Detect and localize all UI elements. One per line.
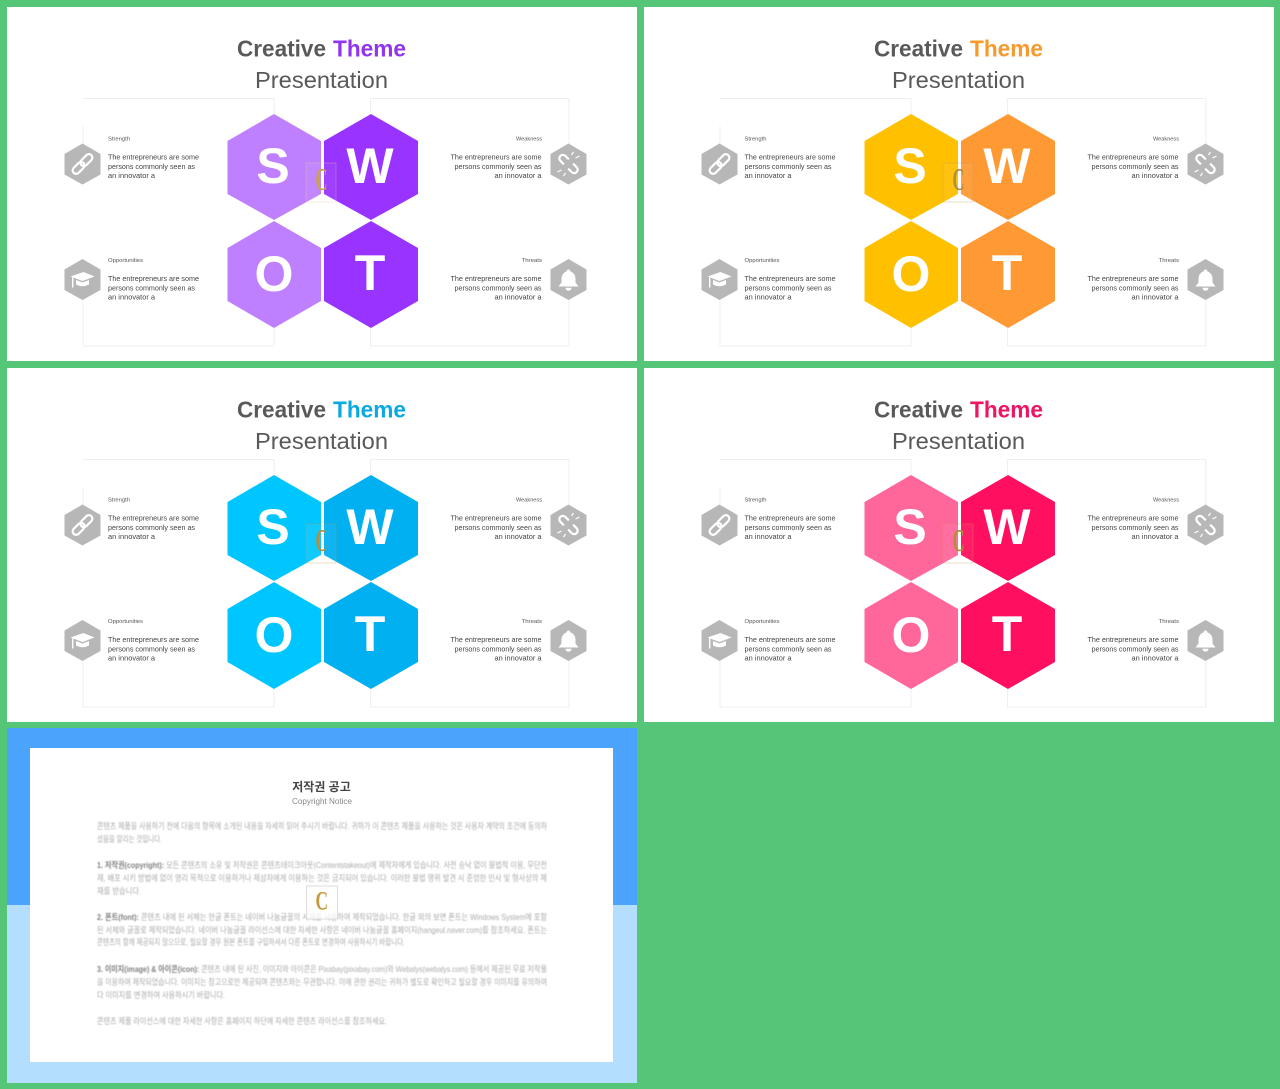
SWOT hexagons — [864, 475, 1055, 689]
icon: graduation cap — [702, 259, 738, 300]
SWOT hexagons: O — [892, 246, 930, 302]
text block: notice body: 재를 받습니다. — [97, 886, 141, 896]
text: weakness: an innovator a — [1132, 171, 1179, 180]
title: Theme — [333, 396, 406, 422]
text: threats: Threats — [522, 619, 542, 625]
title: Theme — [333, 36, 406, 62]
text: strength — [744, 136, 836, 180]
text: threats — [450, 258, 542, 302]
watermark — [943, 522, 973, 563]
panel: pink SWOT slide — [644, 368, 1274, 722]
title: Theme — [970, 396, 1043, 422]
SWOT hexagons: S — [256, 499, 290, 555]
text: threats: an innovator a — [494, 654, 542, 662]
heading: copyright notice: Copyright Notice — [292, 797, 353, 806]
text block: notice body: 콘텐츠 제품을 사용하기 전에 다음의 항목에 소개된 내용을 자세히 읽어 주시기 바랍니다. 귀하가 이 콘텐츠 제품을 사용하는 것은 사용자 계약의 조건에 동의하 — [97, 821, 547, 831]
text: threats: an innovator a — [1132, 654, 1179, 662]
SWOT hexagons — [228, 114, 418, 328]
text: strength: The entrepreneurs are some — [744, 514, 836, 522]
text block: notice body: 2. 폰트(font): 콘텐츠 내에 된 서체는 한글 폰트는 네이버 나눔글꼴의 서체를 사용하여 제작되었습니다. 한글 외의 보면 폰트는 Windows System에 포함 — [97, 912, 547, 922]
SWOT hexagons — [864, 114, 1055, 328]
title: Creative — [874, 396, 963, 422]
icon: broken link — [1188, 504, 1224, 546]
text: strength: The entrepreneurs are some — [744, 152, 836, 162]
text: weakness: Weakness — [1153, 136, 1179, 142]
title: Creative — [237, 36, 326, 62]
text: opportunities — [744, 619, 836, 662]
text: opportunities: persons commonly seen as — [744, 644, 832, 654]
watermark: C — [316, 522, 328, 558]
text: opportunities: Opportunities — [744, 258, 780, 264]
title — [874, 36, 1043, 93]
heading: copyright notice: 저작권 공고 — [292, 779, 351, 794]
text: strength: an innovator a — [744, 532, 792, 541]
SWOT hexagons: O — [255, 246, 293, 302]
icon: link — [702, 144, 738, 184]
text: weakness: The entrepreneurs are some — [450, 514, 542, 522]
text: threats: Threats — [522, 258, 542, 264]
panel: orange SWOT slide — [644, 7, 1274, 361]
text: opportunities: Opportunities — [744, 619, 780, 625]
SWOT hexagons: S — [893, 499, 927, 555]
text: strength: Strength — [744, 498, 766, 504]
icon: bell — [550, 259, 586, 300]
text: strength: persons commonly seen as — [108, 162, 195, 171]
panel: purple SWOT slide — [7, 7, 637, 361]
text: strength: persons commonly seen as — [744, 523, 832, 532]
icon: bell — [550, 620, 586, 661]
text: weakness: an innovator a — [1132, 532, 1179, 541]
text: opportunities: The entrepreneurs are some — [108, 635, 199, 644]
title: Presentation — [255, 67, 388, 93]
text block: notice body: 다 이미지를 변경하여 사용하시기 바랍니다. — [97, 990, 225, 1000]
watermark — [306, 161, 336, 202]
text: weakness: persons commonly seen as — [1092, 523, 1179, 532]
watermark: C — [316, 886, 328, 916]
watermark: C — [952, 522, 964, 558]
SWOT hexagons: W — [983, 499, 1031, 555]
text: threats: The entrepreneurs are some — [450, 274, 542, 283]
text: opportunities: an innovator a — [744, 292, 792, 302]
text block: notice body: 1. 저작권(copyright): 모든 콘텐츠의 소유 및 저작권은 콘텐츠테이크아웃(Contentstakeout)에 제작자에게 있습니다. 사전 승낙 없이 불법적 이용, 무단전 — [97, 860, 547, 870]
title — [237, 396, 406, 454]
text: weakness: Weakness — [1153, 498, 1179, 504]
text: opportunities: Opportunities — [108, 619, 143, 625]
text: strength — [108, 136, 199, 180]
text: threats: Threats — [1158, 619, 1179, 625]
text: weakness: persons commonly seen as — [454, 162, 542, 171]
text block: notice body: 콘텐츠의 함께 제공되지 않으므로, 필요할 경우 원본 폰트를 구입하셔서 다른 폰트로 변경하여 사용하시기 바랍니다. — [97, 937, 405, 947]
text: threats: Threats — [1158, 258, 1179, 264]
text: opportunities: persons commonly seen as — [108, 284, 195, 292]
text: weakness: persons commonly seen as — [454, 523, 542, 532]
text: opportunities: persons commonly seen as — [108, 644, 195, 654]
text: weakness: The entrepreneurs are some — [450, 152, 542, 162]
text: opportunities: The entrepreneurs are some — [108, 274, 199, 283]
title: Creative — [874, 36, 963, 62]
text: opportunities — [108, 258, 199, 302]
title: Theme — [970, 36, 1043, 62]
icon: broken link — [1188, 144, 1224, 184]
text: weakness: Weakness — [516, 498, 542, 504]
text block: notice body: 셨음을 알리는 것입니다. — [97, 834, 162, 844]
icon: graduation cap — [64, 259, 100, 300]
watermark: C — [316, 161, 328, 197]
text: strength: an innovator a — [108, 532, 156, 541]
text: opportunities: an innovator a — [108, 654, 156, 662]
text: opportunities: Opportunities — [108, 258, 143, 264]
icon: link — [702, 504, 738, 546]
text: strength: persons commonly seen as — [108, 523, 195, 532]
text: threats: persons commonly seen as — [1092, 644, 1179, 654]
text: strength: The entrepreneurs are some — [108, 152, 199, 162]
text: weakness: persons commonly seen as — [1092, 162, 1179, 171]
text: opportunities: The entrepreneurs are some — [744, 635, 836, 644]
title: Presentation — [892, 428, 1025, 454]
icon: broken link — [550, 504, 586, 546]
panel: copyright notice — [7, 728, 637, 1083]
text: weakness: The entrepreneurs are some — [1088, 514, 1178, 522]
title: Presentation — [255, 428, 388, 454]
heading: copyright notice — [292, 779, 353, 806]
SWOT hexagons: T — [992, 245, 1022, 301]
SWOT hexagons: T — [355, 245, 385, 301]
text block: notice body — [97, 821, 547, 1026]
text: threats: The entrepreneurs are some — [450, 635, 542, 644]
icon: link — [64, 504, 100, 546]
SWOT hexagons: T — [992, 606, 1022, 662]
text: threats — [1088, 258, 1179, 302]
icon: graduation cap — [64, 620, 100, 661]
text: opportunities — [108, 619, 199, 662]
text: opportunities — [744, 258, 836, 302]
text: threats — [1088, 619, 1179, 662]
title — [874, 396, 1043, 454]
title: Creative — [237, 396, 326, 422]
SWOT hexagons: O — [892, 607, 930, 663]
watermark — [306, 522, 336, 563]
text: strength — [744, 498, 836, 541]
icon: link — [64, 144, 100, 184]
text: strength — [108, 498, 199, 541]
text block: notice body: 콘텐츠 제품 라이선스에 대한 자세한 사항은 홈페이지 하단에 자세한 콘텐츠 라이선스를 참조하세요. — [97, 1016, 387, 1026]
text: opportunities: an innovator a — [744, 654, 792, 662]
text: weakness: an innovator a — [494, 532, 542, 541]
SWOT hexagons: S — [893, 138, 927, 194]
text block: notice body: 을 이용하여 제작되었습니다. 이미지는 참고으로만 제공되며 콘텐츠와는 무관합니다. 이에 관한 권리는 귀하가 별도로 확인하고 필요할 경우 이미지를 유의하여 — [97, 977, 547, 987]
text block: notice body: 3. 이미지(image) & 아이콘(icon): 콘텐츠 내에 된 사진, 이미지와 아이콘은 Pixabay(pixabay.com)와 Webalys(webalys.com) 등에서 제공된 무료 저작물 — [97, 964, 547, 974]
text: strength: Strength — [108, 136, 130, 142]
text block: notice body: 재, 배포 시키 방법에 없이 영리 목적으로 이용하거나 제삼자에게 이용하는 것은 금지되어 있습니다. 이러한 불법 행위 발견 시 준엄한 민사 및 형사상의 제 — [97, 873, 547, 883]
text: opportunities: persons commonly seen as — [744, 284, 832, 292]
watermark — [306, 886, 338, 919]
text: threats: persons commonly seen as — [1092, 284, 1179, 292]
SWOT hexagons: T — [355, 606, 385, 662]
text: threats: an innovator a — [494, 292, 542, 302]
watermark — [943, 161, 973, 202]
title — [237, 36, 406, 93]
text: strength: an innovator a — [108, 171, 156, 180]
text: weakness — [1088, 498, 1179, 541]
text: weakness — [450, 136, 542, 180]
text: weakness — [1088, 136, 1179, 180]
text: weakness — [450, 498, 542, 541]
title: Presentation — [892, 67, 1025, 93]
text: opportunities: The entrepreneurs are some — [744, 274, 836, 283]
text: strength: The entrepreneurs are some — [108, 514, 199, 522]
icon: broken link — [550, 144, 586, 184]
text: opportunities: an innovator a — [108, 292, 156, 302]
icon: graduation cap — [702, 620, 738, 661]
SWOT hexagons — [228, 475, 418, 689]
text: threats: The entrepreneurs are some — [1088, 274, 1178, 283]
icon: bell — [1188, 620, 1224, 661]
text: threats: persons commonly seen as — [454, 284, 542, 292]
SWOT hexagons: S — [256, 138, 290, 194]
text: weakness: an innovator a — [494, 171, 542, 180]
text: strength: persons commonly seen as — [744, 162, 832, 171]
SWOT hexagons: W — [983, 138, 1031, 194]
icon: bell — [1188, 259, 1224, 300]
text: threats: an innovator a — [1132, 292, 1179, 302]
SWOT hexagons: O — [255, 607, 293, 663]
text block: notice body: 된 서체와 글꼴로 제작되었습니다. 네이버 나눔글꼴 라이선스에 대한 자세한 사항은 네이버 나눔글꼴 홈페이지(hangeul.naver.com)를 참조하세요. 폰트는 — [97, 925, 547, 935]
text: strength: an innovator a — [744, 171, 792, 180]
text: threats — [450, 619, 542, 662]
watermark: C — [952, 161, 964, 197]
text: threats: The entrepreneurs are some — [1088, 635, 1178, 644]
SWOT hexagons: W — [346, 138, 394, 194]
text: strength: Strength — [108, 498, 130, 504]
text: threats: persons commonly seen as — [454, 644, 542, 654]
text: strength: Strength — [744, 136, 766, 142]
panel: blue SWOT slide — [7, 368, 637, 722]
SWOT hexagons: W — [346, 499, 394, 555]
text: weakness: Weakness — [516, 136, 542, 142]
text: weakness: The entrepreneurs are some — [1088, 152, 1178, 162]
